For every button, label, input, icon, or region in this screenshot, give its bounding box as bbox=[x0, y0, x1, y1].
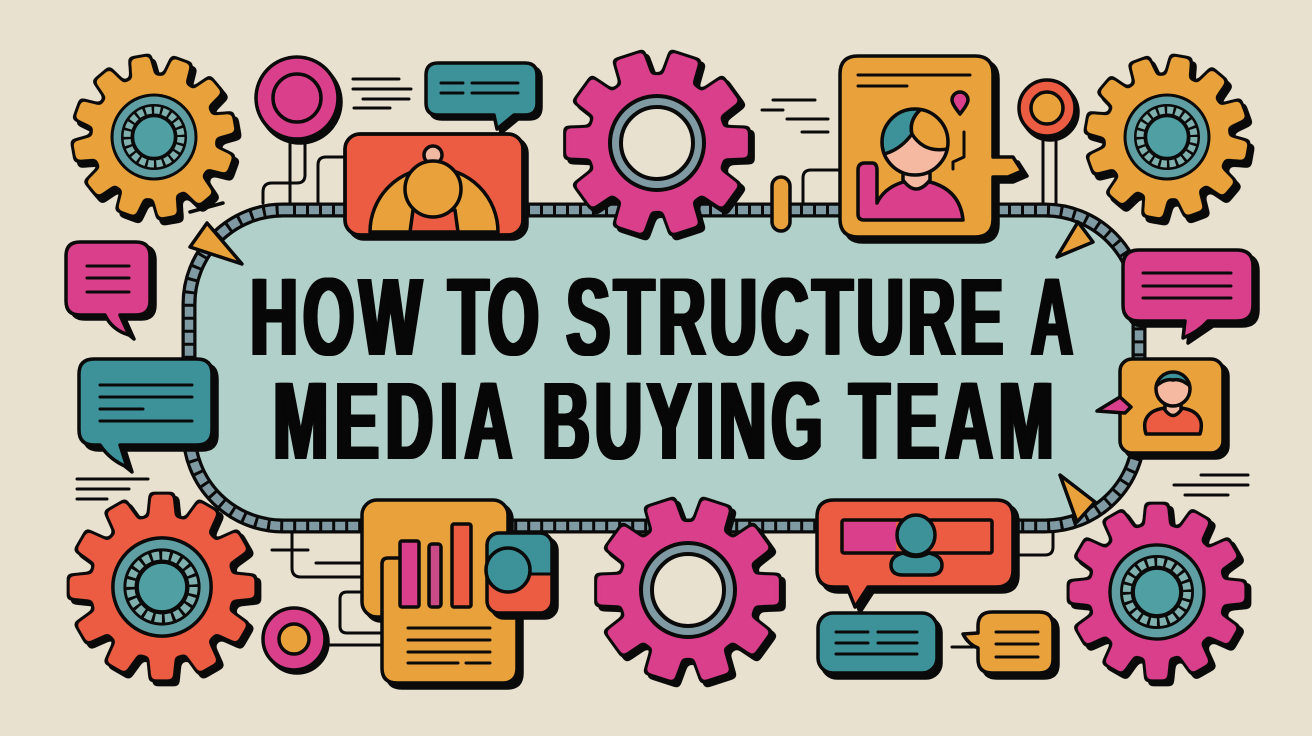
video card: red with person bbox=[345, 134, 527, 239]
profile card: small orange bbox=[1097, 359, 1228, 458]
gear: magenta bottom centre bbox=[597, 499, 783, 685]
connector lines: bottom left bbox=[272, 530, 383, 645]
node: magenta circle bbox=[256, 57, 341, 143]
speech box: teal bottom bbox=[818, 613, 941, 678]
pointer: orange bottom right bbox=[1060, 475, 1095, 522]
speech bubble: magenta right bbox=[1123, 250, 1258, 343]
title bbox=[248, 256, 1074, 483]
connector lines: top right bbox=[803, 134, 1056, 205]
pointer: orange top right bbox=[1057, 222, 1093, 257]
profile card: orange with person bbox=[840, 56, 1027, 242]
gear: orange top right bbox=[1074, 44, 1264, 235]
speech bubble: orange bottom bbox=[952, 612, 1058, 678]
slider handle bbox=[772, 177, 790, 231]
gear: magenta top centre bbox=[566, 52, 752, 238]
node: magenta and orange circle bbox=[263, 608, 328, 673]
speech bubble: magenta left bbox=[66, 242, 155, 339]
pie tile bbox=[486, 533, 557, 618]
title: HOW bbox=[248, 256, 425, 379]
bar chart bbox=[400, 524, 471, 607]
text lines: right bbox=[1174, 475, 1248, 495]
chart card: orange with bars and document bbox=[362, 500, 557, 688]
speech bubble: red with person bbox=[817, 500, 1018, 612]
title: A bbox=[1029, 256, 1071, 379]
title: TO bbox=[446, 256, 536, 379]
speech bubble: teal left bbox=[79, 359, 217, 472]
speech bubble: teal top bbox=[426, 63, 541, 133]
text lines: left bbox=[77, 479, 148, 499]
connector lines: top left bbox=[263, 140, 346, 203]
speed lines bbox=[762, 100, 828, 132]
text lines beside magenta circle bbox=[353, 79, 411, 108]
document bbox=[382, 558, 522, 688]
gear: orange top left bbox=[61, 44, 251, 235]
node: red circle bbox=[1019, 80, 1078, 140]
pointer: orange top left bbox=[190, 223, 242, 264]
central title panel with film-strip border bbox=[189, 210, 1139, 526]
title: BUYING bbox=[540, 360, 826, 483]
title: TEAM bbox=[847, 360, 1057, 483]
title: STRUCTURE bbox=[564, 256, 1005, 379]
gear: magenta bottom right bbox=[1070, 505, 1248, 683]
connector line: bottom right bbox=[1015, 530, 1053, 555]
gear: red bottom left bbox=[70, 495, 258, 683]
title: MEDIA bbox=[271, 360, 517, 483]
back card bbox=[362, 500, 512, 621]
